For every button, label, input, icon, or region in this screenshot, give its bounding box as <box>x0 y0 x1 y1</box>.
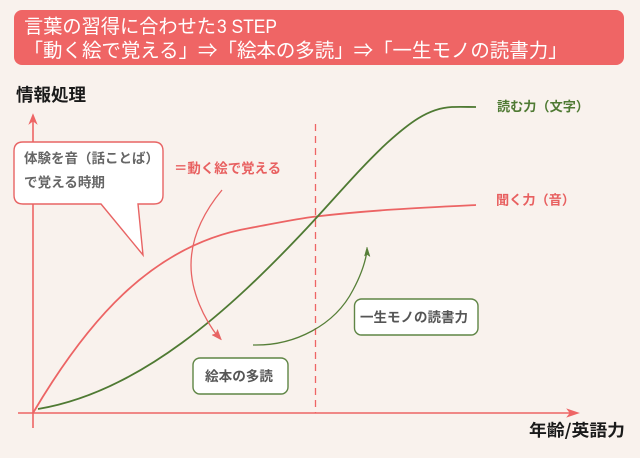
x axis arrow <box>18 409 579 417</box>
label: listening: 聞く力（音） <box>496 190 575 208</box>
x axis label: 年齢/英語力 <box>529 417 625 441</box>
dashed age marker <box>314 124 316 413</box>
box: lifelong reading: 一生モノの読書力 <box>360 306 468 326</box>
y axis arrow <box>29 114 37 428</box>
arrow: to picture books <box>191 190 222 340</box>
arrow: to lifelong reading <box>253 247 370 345</box>
title banner: 「動く絵で覚える」⇒「絵本の多読」⇒「一生モノの読書力」 <box>24 34 568 63</box>
box: picture books: 絵本の多読 <box>205 365 274 385</box>
box: lifelong reading <box>354 299 478 335</box>
title banner: 言葉の習得に合わせた <box>24 10 216 39</box>
curve: reading <box>38 107 476 409</box>
callout: で覚える時期 <box>24 171 105 191</box>
label: moving pictures: ＝動く絵で覚える <box>174 157 281 177</box>
title banner: 3 STEP <box>217 17 277 38</box>
curve: listening <box>33 205 476 413</box>
title banner <box>14 10 624 65</box>
callout <box>14 142 163 255</box>
box: picture books <box>193 358 288 394</box>
y axis label: 情報処理 <box>16 82 86 107</box>
label: reading: 読む力（文字） <box>497 96 589 115</box>
callout: 体験を音（話ことば） <box>24 147 159 167</box>
